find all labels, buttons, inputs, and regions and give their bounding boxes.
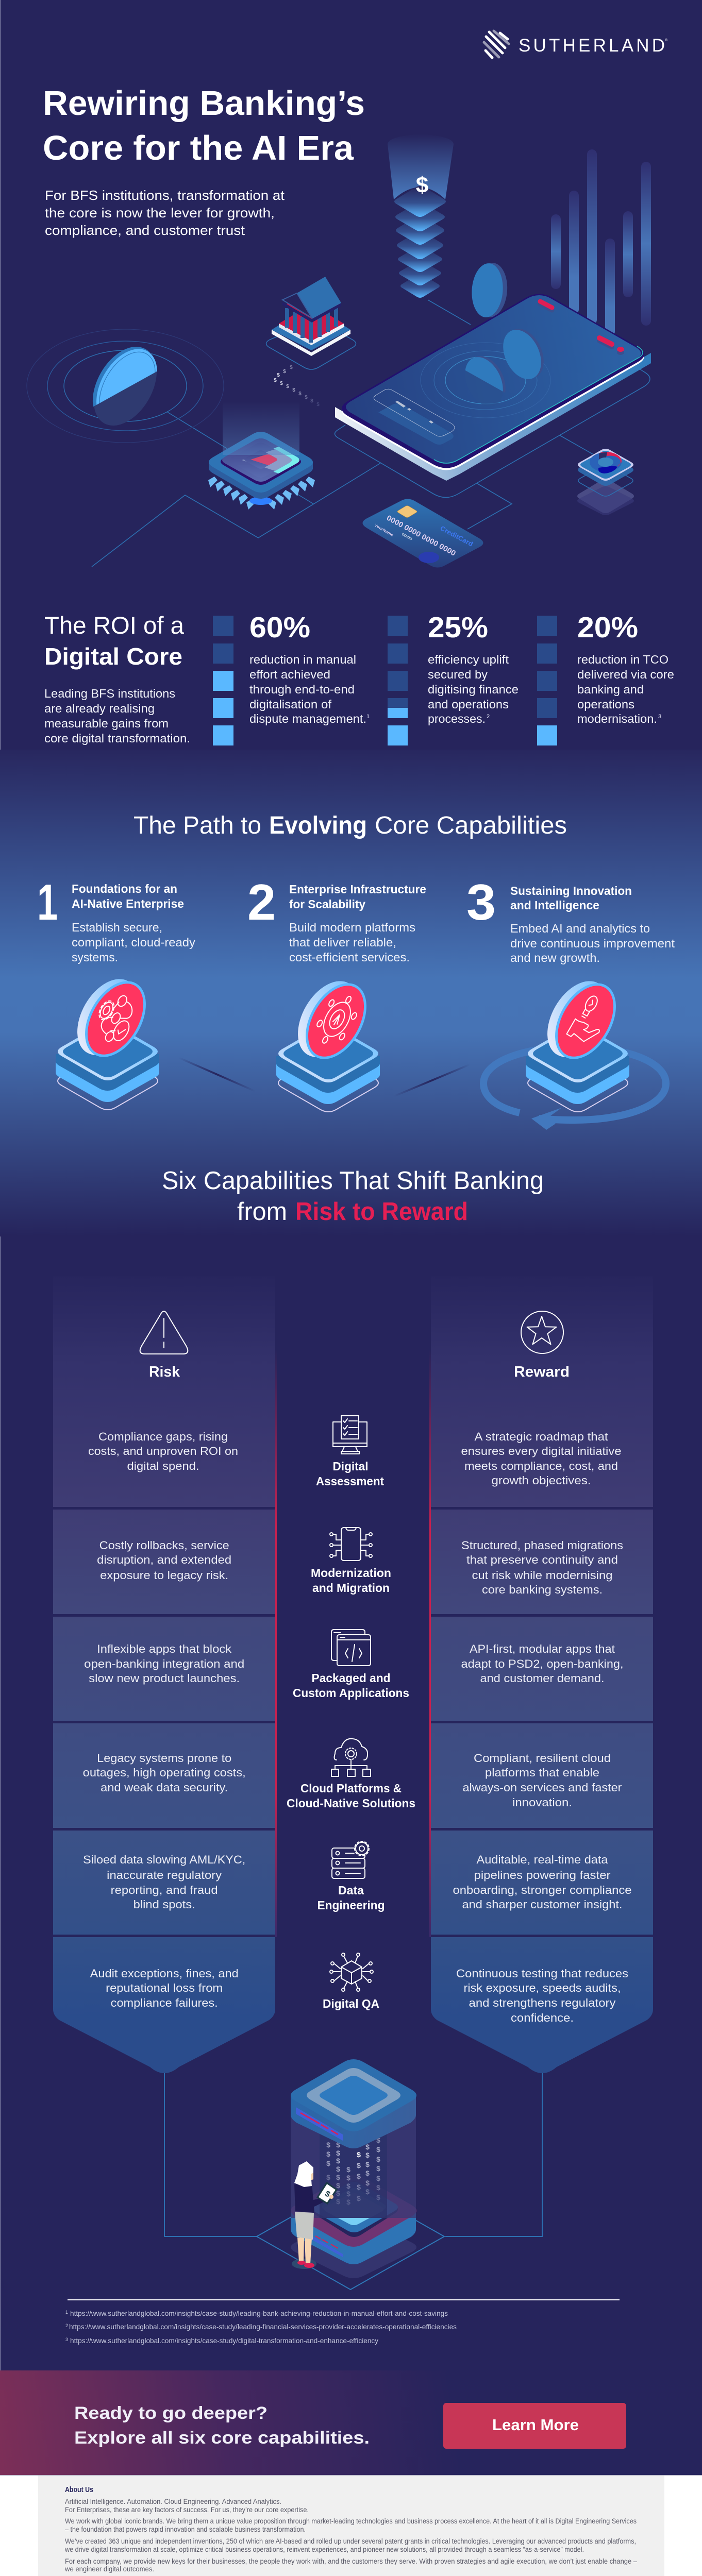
icon: database gear [332, 1841, 369, 1878]
falling dollars: $ [357, 2150, 361, 2159]
panel: risk column: exposure to legacy risk. [100, 1569, 228, 1582]
stat: 20%: modernisation. [577, 712, 657, 725]
falling dollars: $ [365, 2143, 370, 2151]
capability: digital qa [323, 1953, 379, 2010]
falling dollars: $ [365, 2151, 370, 2159]
button: learn more [443, 2403, 626, 2449]
capability: cloud platforms: Cloud Platforms & [300, 1782, 402, 1795]
section: ROI heading: measurable gains from [44, 717, 169, 730]
panel: risk column: Audit exceptions, fines, and [90, 1967, 239, 1980]
stat: 60%: digitalisation of [249, 698, 332, 711]
falling dollars: $ [357, 2183, 361, 2191]
step 1: compliant, cloud-ready [72, 936, 196, 949]
icon: donut chart block [577, 449, 634, 515]
panel: about us footer: About Us [65, 2485, 93, 2494]
falling dollars: $ [336, 2165, 340, 2173]
panel: reward column: Structured, phased migrations [461, 1539, 623, 1552]
capability: modernization and migration: and Migration [312, 1581, 390, 1595]
falling dollars: $ [336, 2173, 340, 2181]
panel: reward column: risk exposure, speeds audits, [464, 1981, 621, 1994]
panel: reward column: confidence. [511, 2011, 574, 2024]
capability: modernization and migration: Modernization [311, 1566, 391, 1580]
stat: 20%: reduction in TCO [577, 653, 668, 666]
falling dollars: $ [346, 2190, 350, 2198]
falling dollars: $ [357, 2172, 361, 2180]
step 3: drive continuous improvement [510, 937, 675, 950]
icon: credit card: 00/00 [401, 533, 413, 541]
panel: risk column: outages, high operating costs, [83, 1766, 246, 1779]
step 2: for Scalability [289, 897, 365, 911]
panel: reward column: adapt to PSD2, open-banking, [461, 1657, 624, 1670]
panel: reward column: and customer demand. [480, 1672, 604, 1685]
falling dollars: $ [346, 2165, 350, 2174]
button: learn more: Learn More [492, 2416, 579, 2434]
step 1: Establish secure, [72, 921, 162, 934]
connector stripes [179, 1057, 470, 1097]
panel: reward column: Auditable, real-time data [476, 1853, 608, 1866]
glass column [291, 2112, 416, 2218]
panel: reward column: meets compliance, cost, and [464, 1460, 618, 1472]
squares 1 of 5 [537, 616, 557, 745]
capability: packaged and custom applications [293, 1630, 409, 1700]
stat: 20%: 3 [658, 714, 661, 720]
top slab [291, 2059, 416, 2148]
icon: dollar trail: $ [280, 381, 283, 386]
falling dollars: $ [336, 2157, 340, 2165]
stat: 20%: banking and [577, 683, 644, 696]
panel: risk column: costs, and unproven ROI on [88, 1445, 238, 1458]
falling dollars [326, 2136, 380, 2206]
panel: reward column: ensures every digital initiative [461, 1445, 622, 1458]
stat: 60%: 1 [366, 714, 370, 720]
stat: 25%: digitising finance [428, 683, 519, 696]
stat: 60%: dispute management. [249, 712, 366, 725]
icon: code windows [331, 1630, 371, 1666]
stat: 25%: processes. [428, 712, 486, 725]
icon: floating coin [470, 262, 509, 318]
icon: credit card: 0000 0000 0000 0000 [385, 514, 457, 558]
figure: woman with tablet [292, 2161, 337, 2269]
footnotes: 3 [65, 2337, 68, 2342]
step 3: Sustaining Innovation [510, 884, 632, 897]
panel: reward column: always-on services and faster [463, 1781, 622, 1794]
section: ROI heading: are already realising [44, 702, 155, 715]
stat: 60%: effort achieved [249, 668, 330, 681]
icon: dollar trail: $ [316, 402, 320, 408]
panel: about us footer: we engineer digital outcomes. [64, 2565, 154, 2573]
stat: 60%: through end-to-end [249, 683, 355, 696]
capability: cloud platforms [287, 1739, 415, 1810]
panel: risk column: compliance failures. [111, 1996, 218, 2009]
capability: data engineering: Engineering [317, 1899, 385, 1912]
footnotes: https://www.sutherlandglobal.com/insights/case-study/digital-transformation-and-enhance-efficiency [70, 2336, 378, 2345]
panel: about us footer: Artificial Intelligence. Automation. Cloud Engineering. Advanced Analytics. [65, 2498, 281, 2505]
panel: reward column: and sharper customer insight. [462, 1898, 623, 1911]
squares 2.5 of 5 [388, 616, 408, 745]
hero subtitle: compliance, and customer trust [45, 223, 245, 238]
falling dollars: $ [376, 2183, 380, 2192]
step 2: cost-efficient services. [289, 951, 410, 964]
falling dollars: $ [376, 2164, 380, 2173]
stat: 60%: reduction in manual [249, 653, 356, 666]
illustration: money tower [257, 2059, 444, 2290]
step 3: 3 [466, 874, 496, 930]
icon: chip [208, 401, 315, 510]
falling dollars: $ [336, 2181, 340, 2190]
red column dividers [275, 1350, 431, 1937]
falling dollars: $ [357, 2161, 361, 2170]
stat: 20%: delivered via core [577, 668, 674, 681]
panel: reward column: cut risk while modernising [472, 1569, 612, 1582]
panel: reward column: Reward [514, 1364, 570, 1380]
icon: dollar trail [274, 365, 320, 408]
icon: dollar trail: $ [290, 365, 293, 370]
panel: reward column: platforms that enable [485, 1766, 599, 1779]
falling dollars: $ [336, 2197, 340, 2206]
step 3: Embed AI and analytics to [510, 922, 650, 935]
panel: about us footer: We’ve created 363 unique and independent inventions, 250 of which are AI-based and rolled up under several patent grants in critical technologies. Leveraging our advanced products and platforms, [65, 2537, 636, 2545]
stat: 60% [213, 611, 370, 745]
heading: six capabilities: from [237, 1198, 287, 1226]
panel: reward column [431, 1276, 653, 2073]
capability: digital assessment: Assessment [316, 1475, 384, 1488]
falling dollars: $ [365, 2179, 370, 2187]
capability: modernization and migration [311, 1528, 391, 1595]
icon: dollar trail: $ [286, 384, 289, 389]
falling dollars: $ [357, 2140, 361, 2148]
icon: dollar beam and stack [388, 134, 454, 298]
capability: digital assessment [316, 1416, 384, 1488]
section: ROI heading: core digital transformation. [44, 732, 190, 745]
hero subtitle: the core is now the lever for growth, [45, 205, 275, 221]
falling dollars: $ [376, 2145, 380, 2154]
icon: half coin with rings [27, 329, 224, 443]
panel: risk column [53, 1276, 275, 2073]
section: ROI heading: Leading BFS institutions [44, 687, 175, 700]
icon: credit card [363, 499, 483, 568]
panel: reward column: that preserve continuity and [466, 1553, 618, 1566]
section: ROI heading: Digital Core [44, 643, 182, 670]
stat: 25%: efficiency uplift [428, 653, 509, 666]
step 1: AI-Native Enterprise [72, 897, 184, 910]
falling dollars: $ [365, 2169, 370, 2177]
falling dollars: $ [357, 2194, 361, 2202]
panel: risk column: Siloed data slowing AML/KYC, [83, 1853, 245, 1866]
panel: risk column: Risk [149, 1364, 180, 1380]
heading: path to evolving core capabilities [133, 812, 567, 839]
icon: pedestal 3 hand and bulb [526, 971, 629, 1112]
stat: 25%: 25% [428, 611, 488, 644]
heading: path to evolving core capabilities: The Path to [133, 812, 261, 839]
panel: reward column: growth objectives. [492, 1474, 591, 1487]
panel: about us footer: – the foundation that powers rapid innovation and scalable business transformation. [65, 2526, 306, 2533]
stat: 25%: secured by [428, 668, 488, 681]
hero subtitle: For BFS institutions, transformation at [45, 188, 285, 203]
connector lines to tower [164, 2073, 542, 2236]
hero title: Rewiring Banking’s [43, 84, 365, 123]
falling dollars: $ [336, 2189, 340, 2197]
panel: reward column: A strategic roadmap that [474, 1430, 608, 1443]
capability: digital assessment: Digital [333, 1460, 368, 1473]
footnotes: https://www.sutherlandglobal.com/insights/case-study/leading-bank-achieving-reduction-in-manual-effort-and-cost-savings [70, 2309, 448, 2317]
call to action band [0, 2370, 702, 2475]
hero title [43, 84, 365, 167]
panel: risk column: reputational loss from [106, 1981, 223, 1994]
capability: packaged and custom applications: Packaged and [311, 1671, 391, 1685]
icon: dollar trail: $ [277, 372, 280, 378]
icon: dollar trail: $ [274, 378, 277, 383]
header logo [484, 31, 668, 58]
call to action band: Ready to go deeper? [74, 2403, 268, 2423]
panel: reward column: API-first, modular apps that [470, 1642, 615, 1655]
capability: cloud platforms: Cloud-Native Solutions [287, 1797, 415, 1810]
cycle arrow ring [483, 1047, 666, 1130]
falling dollars: $ [376, 2193, 380, 2201]
falling dollars: $ [365, 2188, 370, 2196]
lower slab [291, 2175, 416, 2264]
panel: risk column: open-banking integration and [84, 1657, 244, 1670]
panel: risk column: Inflexible apps that block [97, 1642, 232, 1655]
falling dollars: $ [376, 2136, 380, 2144]
stat: 20% [537, 611, 674, 745]
panel: reward column: and strengthens regulatory [469, 1996, 615, 2009]
heading: six capabilities [162, 1167, 544, 1226]
falling dollars: $ [376, 2155, 380, 2163]
icon: monitor checklist [333, 1416, 367, 1454]
icon: dollar trail: $ [310, 398, 313, 404]
icon: credit card: YourName [374, 523, 394, 537]
panel: risk column: Costly rollbacks, service [99, 1539, 229, 1552]
panel: risk column: disruption, and extended [97, 1553, 231, 1566]
step 2: Enterprise Infrastructure [289, 883, 426, 896]
icon: cloud gear tree [331, 1739, 371, 1776]
icon: dollar trail: $ [292, 387, 295, 393]
panel: reward column: innovation. [512, 1796, 572, 1809]
hero circuit lines [92, 300, 650, 567]
icon: dollar trail: $ [305, 395, 308, 400]
falling dollars: $ [326, 2173, 330, 2181]
heading: path to evolving core capabilities: Core Capabilities [375, 812, 567, 839]
falling dollars: $ [336, 2149, 340, 2157]
panel: reward column: Continuous testing that reduces [456, 1967, 628, 1980]
stat: 25% [388, 611, 519, 745]
icon: dollar beam and stack: $ [416, 173, 428, 198]
falling dollars: $ [346, 2182, 350, 2190]
step 2: Build modern platforms [289, 921, 415, 934]
header logo: SUTHERLAND [519, 36, 665, 56]
footnotes: 1 [65, 2310, 68, 2315]
step 3: and Intelligence [510, 899, 599, 912]
panel: risk column: reporting, and fraud [111, 1884, 218, 1896]
panel: about us footer: For each company, we provide new keys for their businesses, the people they work with, and the customers they serve. With proven strategies and agile execution, we don’t just enable change – [65, 2557, 637, 2565]
panel: reward column: Compliant, resilient cloud [474, 1752, 611, 1765]
panel: about us footer: We work with global iconic brands. We bring them a unique value proposition through market-leading technologies and business process excellence. At the heart of it all is Digital Engineering Services [65, 2517, 637, 2525]
step 2: 2 [247, 874, 276, 930]
capability: packaged and custom applications: Custom Applications [293, 1686, 409, 1700]
stat: 20%: 20% [577, 611, 638, 644]
step 1: Foundations for an [72, 882, 177, 895]
figure: woman with tablet: $ [323, 2190, 331, 2199]
panel: reward column: core banking systems. [482, 1583, 603, 1596]
icon: circuit cube [330, 1953, 373, 1991]
step 1: systems. [72, 951, 118, 964]
icon: pedestal 2 network [276, 971, 380, 1112]
falling dollars: $ [336, 2141, 340, 2149]
heading: path to evolving core capabilities: Evolving [269, 812, 367, 839]
step 3 [466, 874, 675, 964]
step 2: that deliver reliable, [289, 936, 396, 949]
hero title: Core for the AI Era [43, 129, 354, 167]
panel: risk column: Compliance gaps, rising [98, 1430, 228, 1443]
footnote divider [68, 2299, 620, 2300]
panel: risk column: slow new product launches. [89, 1672, 240, 1685]
stat: 25%: and operations [428, 698, 509, 711]
icon: dollar trail: $ [283, 369, 286, 375]
capability: data engineering: Data [338, 1884, 364, 1897]
step 1: 1 [37, 874, 58, 930]
icon: star in circle [521, 1311, 563, 1353]
falling dollars: $ [326, 2141, 330, 2149]
icon: bank [266, 277, 356, 369]
icon: phone circuit [330, 1528, 372, 1561]
panel: risk column: Legacy systems prone to [97, 1752, 231, 1765]
falling dollars: $ [326, 2150, 330, 2158]
falling dollars: $ [326, 2159, 330, 2167]
panel: about us footer [0, 2475, 702, 2576]
panel: risk column: inaccurate regulatory [107, 1869, 222, 1882]
panel: risk column: and weak data security. [101, 1781, 228, 1794]
heading: six capabilities: Six Capabilities That Shift Banking [162, 1167, 544, 1195]
stat: 60%: 60% [249, 611, 310, 644]
footnotes [65, 2309, 457, 2345]
capability: digital qa: Digital QA [323, 1997, 379, 2010]
step 1 [37, 874, 196, 964]
heading: six capabilities: Risk to Reward [295, 1198, 468, 1226]
stat: 25%: 2 [487, 714, 490, 720]
panel: about us footer: For Enterprises, these are key factors of success. For us, they’re our core expertise. [65, 2506, 309, 2514]
stat: 20%: operations [577, 698, 634, 711]
panel: reward column: pipelines powering faster [474, 1869, 610, 1882]
step 2 [247, 874, 426, 964]
panel: risk column: blind spots. [133, 1898, 195, 1911]
header logo: ® [665, 38, 668, 42]
phone [335, 294, 651, 481]
squares 3 of 5 [213, 616, 233, 745]
falling dollars: $ [346, 2174, 350, 2182]
panel: reward column: onboarding, stronger compliance [453, 1884, 632, 1896]
call to action band: Explore all six core capabilities. [74, 2428, 370, 2448]
section: ROI heading [44, 612, 190, 745]
panel: about us footer: we drive digital transformation at scale, optimize critical business operations, reinvent experiences, and pioneer new solutions, all provided through a seamless “as-a-service” model. [64, 2546, 584, 2553]
section: ROI heading: The ROI of a [44, 612, 185, 639]
footnotes: https://www.sutherlandglobal.com/insights/case-study/leading-financial-services-provider-accelerates-operational-efficiencies [69, 2323, 457, 2331]
falling dollars: $ [346, 2198, 350, 2206]
capability: data engineering [317, 1841, 385, 1912]
footnotes: 2 [65, 2323, 68, 2328]
step 3: and new growth. [510, 951, 600, 964]
hero subtitle [45, 188, 285, 238]
icon: dollar trail: $ [298, 391, 302, 397]
falling dollars: $ [365, 2160, 370, 2168]
icon: warning triangle [140, 1311, 188, 1354]
bars behind phone [551, 149, 651, 336]
panel: risk column: digital spend. [127, 1460, 199, 1472]
icon: pedestal 1 gears and checks [56, 969, 159, 1110]
icon: credit card: CreditCard [439, 524, 474, 548]
falling dollars: $ [376, 2174, 380, 2182]
